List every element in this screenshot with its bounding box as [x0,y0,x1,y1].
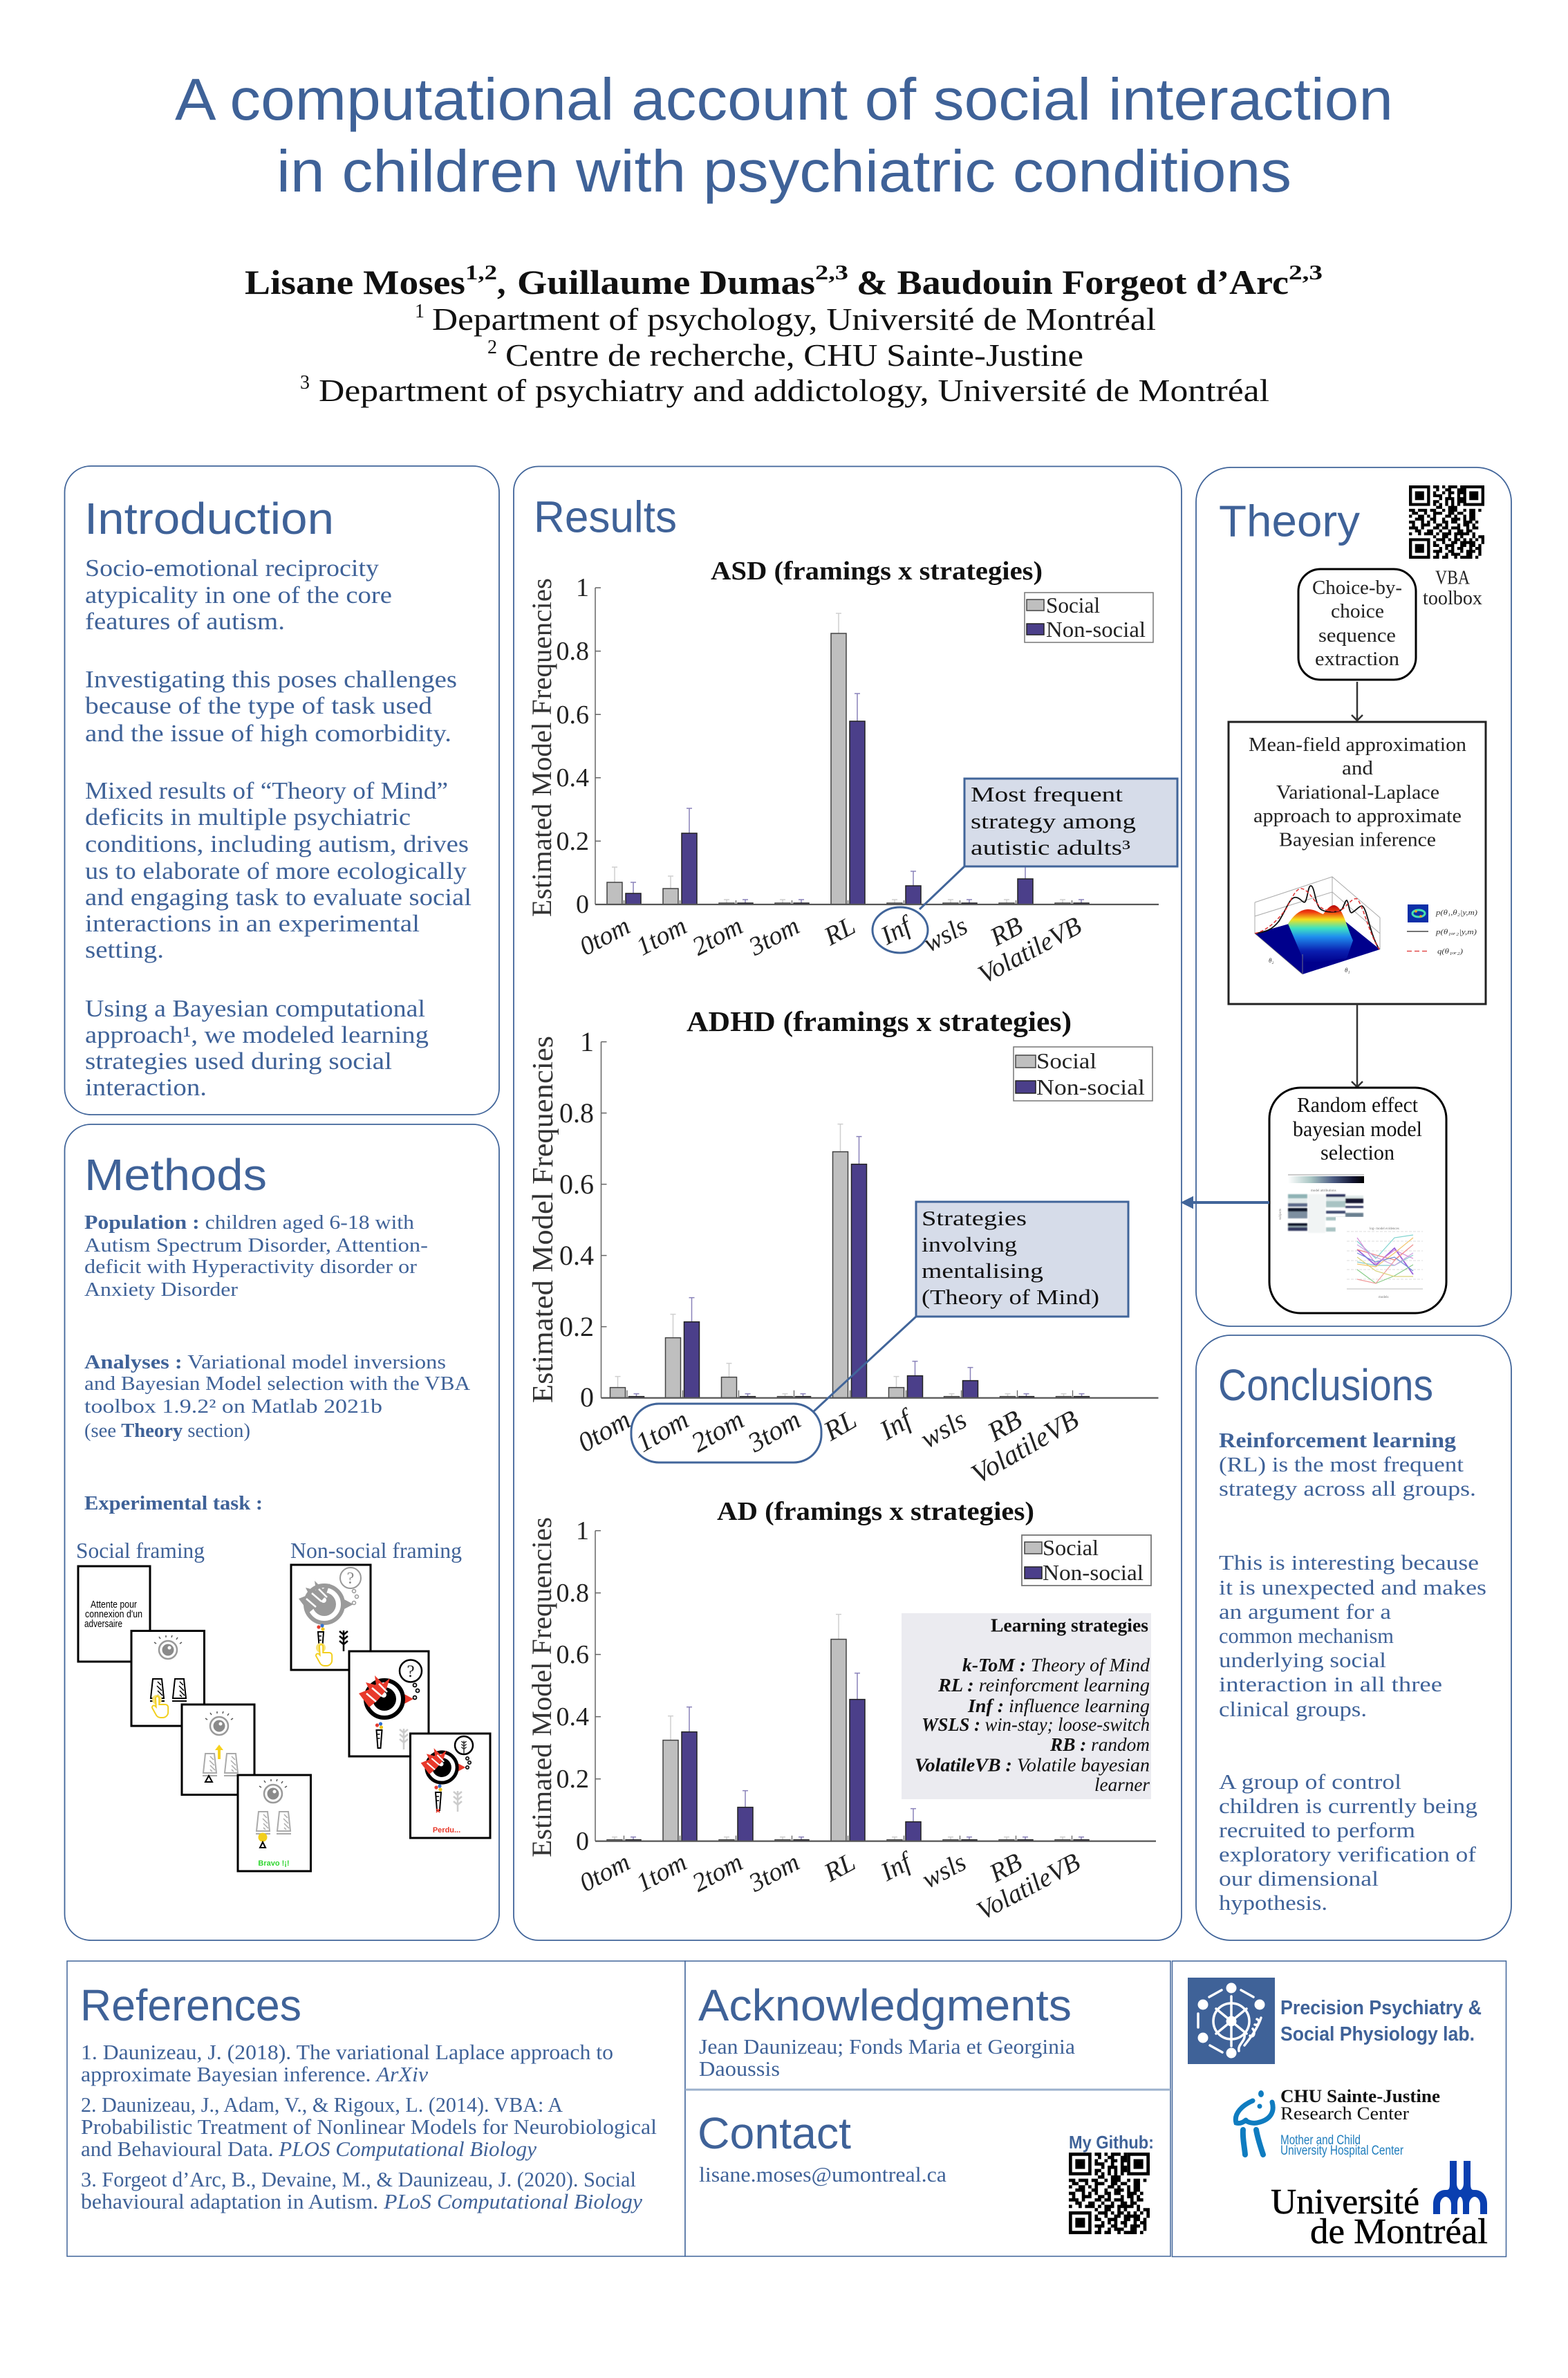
chart: log model evidence lines: models [1379,1296,1388,1299]
x tick labels: 0tom [575,911,635,962]
label: VBA toolbox: toolbox [1423,588,1482,609]
card: gray bird choosing [291,1565,371,1670]
text block: introduction body: Using a Bayesian computational [85,995,425,1022]
card: waiting screen [78,1566,150,1662]
text block: conclusion 3: hypothesis. [1219,1891,1327,1915]
chart: ASD framings x strategies [526,557,1177,990]
card: waiting screen: Attente pour [91,1599,137,1610]
bars and axes [601,1042,1159,1398]
x tick labels: 2tom [687,911,747,962]
text block: introduction body: Mixed results of “Theory of Mind” [85,777,448,804]
legend: Non-social [1036,1075,1145,1099]
legend: Non-social [1046,617,1146,642]
text: acknowledgments body: Daoussis [699,2056,780,2081]
flow step: random effect model selection [1269,1088,1446,1313]
chart: log model evidence lines [1336,1217,1423,1300]
callout: strategies involving mentalising: Strategies [922,1206,1027,1230]
x tick labels: RL [819,1848,860,1888]
card: cup lifted [182,1704,254,1795]
chart: model attribution heatmap: subjects [1279,1209,1282,1220]
arrow: to model selection box [1352,1004,1363,1087]
card: perdu outcome [411,1734,490,1838]
text: experimental task label: Experimental task : [84,1492,263,1514]
y tick labels: 0.4 [556,763,589,792]
text block: conclusion 2: This is interesting because [1219,1550,1479,1575]
box: learning strategies key: VolatileVB : Volatile bayesian [915,1755,1150,1776]
text block: reference list: and Behavioural Data. PLOS Computational Biology [81,2137,536,2161]
icon: VBA toolbox QR code [1409,485,1484,559]
x tick labels: Inf [874,1402,920,1447]
flow step: choice sequence extraction: sequence [1318,625,1396,647]
legend: Social [1036,1048,1096,1073]
text block: conclusion 3: exploratory verification of [1219,1842,1477,1866]
box: learning strategies key [902,1613,1151,1799]
flow step: choice sequence extraction: Choice-by- [1312,577,1402,599]
authors: & Baudouin Forgeot d’Arc [857,263,1289,301]
text: precision psychiatry lab name: Precision Psychiatry & [1280,1997,1482,2019]
y tick labels [556,573,589,919]
heading: acknowledgments: Acknowledgments [698,1980,1072,2030]
x tick labels: RB [984,1848,1027,1888]
heading: methods: Methods [84,1150,267,1200]
affiliations [300,301,1269,408]
box: learning strategies key: RB : random [1049,1734,1150,1755]
card: red bird thinking [349,1651,429,1756]
chart title: ASD: ASD (framings x strategies) [711,557,1043,586]
x tick labels: 2tom [686,1404,749,1458]
text block: analyses: toolbox 1.9.2² on Matlab 2021b [84,1395,382,1418]
card: red bird thinking: ? [407,1662,415,1681]
chart: ADHD framings x strategies [528,1005,1159,1489]
y tick labels: 0.6 [559,1169,594,1200]
panel: results [514,466,1182,1940]
x tick labels: 1tom [631,911,691,962]
text block: population: deficit with Hyperactivity disorder or [84,1256,417,1278]
logo: CHU Sainte-Justine [1235,2086,1440,2158]
heading: references: References [80,1980,301,2030]
flow step: mean-field approximation: Mean-field approximation [1249,734,1466,756]
text block: introduction body: Socio-emotional reciprocity [85,555,380,582]
y tick labels: 0 [580,1382,594,1413]
logo: precision psychiatry lab [1188,1978,1275,2064]
text block: conclusion 3: A group of control [1219,1769,1401,1794]
card: perdu outcome: Perdu... [433,1826,460,1834]
card: waiting screen: connexion d'un [85,1609,142,1620]
chart title: AD: AD (framings x strategies) [717,1497,1034,1526]
box: learning strategies key: WSLS : win-stay; loose-switch [922,1714,1150,1735]
x tick labels: 3tom [744,1848,804,1898]
panel: conclusions [1196,1335,1511,1940]
y tick labels: 0.4 [559,1240,594,1271]
text block: conclusion 3: recruited to perform [1219,1818,1415,1842]
text block: conclusion 2: an argument for a [1219,1599,1391,1624]
affiliations: 3 [300,372,310,393]
text block: conclusion 2 [1219,1550,1486,1721]
chart: 3D posterior surface [1255,877,1380,974]
x tick labels: 1tom [631,1848,691,1898]
text block: introduction body: deficits in multiple psychiatric [85,803,411,830]
text block: conclusion 2: common mechanism [1219,1624,1394,1648]
callout: strategies involving mentalising: mentalising [922,1258,1043,1283]
flow step: random effect model selection: bayesian model [1293,1117,1422,1141]
text block: analyses: and Bayesian Model selection with the VBA [84,1373,470,1395]
label: non-social framing: Non-social framing [290,1538,462,1563]
logo: Université de Montréal: Université [1271,2182,1419,2222]
panel: logos [1173,1961,1506,2257]
card: gray bird choosing: ? [347,1570,354,1588]
text block: analyses: (see Theory section) [84,1420,250,1442]
y tick labels: 0 [576,890,589,919]
panel: introduction [65,466,499,1115]
text block: conclusion 3: our dimensional [1219,1866,1379,1891]
callout: most frequent strategy: strategy among [971,809,1136,833]
panel: references [67,1961,685,2256]
text block: introduction body: strategies used during social [85,1048,392,1075]
flow step: mean-field approximation: Variational-Laplace [1276,782,1439,803]
label: VBA toolbox [1423,567,1482,609]
authors [245,260,1323,301]
flow step: mean-field approximation: Bayesian inference [1279,830,1436,851]
x tick labels: VolatileVB [966,1404,1084,1489]
logo: CHU Sainte-Justine: Research Center [1280,2103,1409,2124]
authors: 2,3 [815,260,848,284]
text: acknowledgments body [699,2034,1075,2081]
text block: introduction body: setting. [85,936,164,963]
box: learning strategies key: Inf : influence learning [967,1696,1150,1716]
x tick labels: 1tom [631,1404,694,1458]
chart: model attribution heatmap: model attributions [1311,1189,1336,1193]
text block: reference list: behavioural adaptation in Autism. PLoS Computational Biology [81,2189,642,2213]
text block: conclusion 3: children is currently being [1219,1794,1477,1818]
text block: introduction body [85,555,472,1101]
x tick labels: Inf [875,1846,918,1887]
x tick labels [572,1402,1084,1489]
text block: conclusion 1 [1219,1428,1476,1501]
text block: conclusion 3 [1219,1769,1477,1915]
box: learning strategies key: Learning strategies [991,1615,1148,1636]
card: waiting screen: adversaire [84,1619,122,1630]
legend [1022,1535,1151,1586]
text block: introduction body: Investigating this poses challenges [85,666,457,693]
box: learning strategies key: learner [1094,1774,1150,1795]
figure: non-social framing task cards [291,1565,490,1838]
affiliations: 1 [415,301,424,322]
x tick labels: wsls [919,911,972,958]
chart title: ADHD: ADHD (framings x strategies) [687,1005,1072,1037]
y tick labels: 0.2 [556,827,589,856]
text block: analyses: Analyses : Variational model inversions [84,1351,446,1373]
callout: most frequent strategy [872,779,1177,953]
text block: population [84,1211,428,1301]
text block: reference list: 2. Daunizeau, J., Adam, V., & Rigoux, L. (2014). VBA: A [81,2092,563,2117]
text block: introduction body: us to elaborate of more ecologically [85,857,467,884]
authors: 2,3 [1289,260,1323,284]
legend [1025,593,1153,642]
x tick labels: VolatileVB [973,911,1086,990]
figure: social framing task cards [78,1566,311,1871]
text block: population: Population : children aged 6-18 with [84,1211,415,1234]
card: choosing a cup [131,1631,205,1726]
x tick labels: 3tom [744,911,804,962]
label: VBA toolbox: VBA [1435,567,1471,589]
x tick labels [575,1846,1085,1926]
text block: population: Anxiety Disorder [84,1279,238,1301]
text: precision psychiatry lab name [1280,1997,1482,2045]
flow step: choice sequence extraction: extraction [1315,649,1399,670]
y tick labels: 0.8 [556,637,589,666]
heading: theory: Theory [1219,496,1360,546]
text: acknowledgments body: Jean Daunizeau; Fonds Maria et Georginia [699,2034,1075,2059]
x tick labels [575,910,1086,990]
y tick labels: 0.8 [556,1579,589,1608]
legend: Non-social [1043,1560,1144,1585]
x tick labels: wsls [917,1848,971,1895]
heading: conclusions: Conclusions [1218,1360,1433,1410]
y tick labels: 0 [576,1827,589,1856]
panel: theory [1196,467,1511,1326]
icon: github QR code [1069,2153,1150,2234]
y tick labels: 0.8 [559,1097,594,1128]
legend: Social [1043,1535,1099,1560]
y tick labels: 0.6 [556,700,589,730]
chart: model attribution heatmap [1279,1175,1364,1233]
text block: introduction body: interaction. [85,1074,207,1101]
x tick labels: 3tom [742,1404,806,1458]
y tick labels: 1 [576,1516,589,1545]
text block: reference list: 3. Forgeot d’Arc, B., Devaine, M., & Daunizeau, J. (2020). Social [81,2167,636,2191]
chart: 3D posterior surface: θ₁ [1345,967,1350,974]
card: bravo outcome [238,1775,311,1871]
bars and axes [595,1531,1156,1841]
x tick labels: RB [985,911,1027,952]
legend: 3D posterior [1407,904,1477,956]
affiliations: Department of psychiatry and addictology, Université de Montréal [319,373,1269,408]
title [175,67,1393,205]
title: in children with psychiatric conditions [277,139,1291,205]
text block: introduction body: approach¹, we modeled learning [85,1021,429,1048]
y tick labels: 1 [580,1026,594,1057]
legend [1014,1047,1152,1101]
affiliations: 2 [487,337,497,358]
text block: reference list: Probabilistic Treatment of Nonlinear Models for Neurobiological [81,2115,657,2139]
text block: introduction body: and engaging task to evaluate social [85,884,472,911]
flow step: mean-field approximation: approach to approximate [1253,806,1462,827]
text block: introduction body: features of autism. [85,608,285,635]
text block: conclusion 2: clinical groups. [1219,1697,1367,1721]
logo: Université de Montréal: de Montréal [1310,2212,1488,2251]
logo: Université de Montréal [1271,2161,1488,2251]
x tick labels: 0tom [575,1848,635,1898]
box: learning strategies key: k-ToM : Theory of Mind [962,1655,1150,1675]
affiliations: Centre de recherche, CHU Sainte-Justine [505,337,1083,373]
legend: Social [1046,593,1100,617]
y tick labels: 1 [576,573,589,602]
callout: most frequent strategy: autistic adults³ [971,835,1130,860]
y tick labels: 0.2 [556,1765,589,1794]
arrow: model selection to results [1184,1198,1269,1207]
text block: introduction body: conditions, including autism, drives [85,830,469,857]
text block: reference list [81,2040,657,2213]
y tick labels [559,1026,594,1413]
x tick labels: 0tom [572,1404,636,1458]
text block: introduction body: atypicality in one of the core [85,582,392,609]
text block: introduction body: because of the type of task used [85,692,433,719]
legend: 3D posterior: q(θ₁ₒᵣ₂) [1437,947,1463,956]
logo: CHU Sainte-Justine: University Hospital Center [1280,2144,1404,2158]
y axis label: Estimated Model Frequencies [526,578,557,917]
label: social framing: Social framing [76,1538,205,1563]
text block: introduction body: and the issue of high comorbidity. [85,720,451,747]
y tick labels: 0.2 [559,1311,594,1342]
bars and axes [595,588,1159,904]
chart: AD framings x strategies [526,1497,1156,1926]
text block: conclusion 2: underlying social [1219,1648,1386,1672]
y tick labels: 0.4 [556,1702,589,1731]
legend: 3D posterior: p(θ₁ₒᵣ₂|y,m) [1435,928,1477,936]
title: A computational account of social interaction [175,67,1393,133]
y tick labels [556,1516,589,1856]
chart: 3D posterior surface: θ₂ [1269,957,1274,964]
heading: introduction: Introduction [84,494,334,544]
y axis label: Estimated Model Frequencies [528,1036,559,1403]
legend: 3D posterior: p(θ₁,θ₂|y,m) [1435,909,1477,917]
panel: acknowledgments and contact [685,1961,1170,2256]
text block: analyses [84,1351,470,1442]
heading: contact: Contact [698,2108,851,2158]
flow step: mean-field approximation [1229,722,1486,1004]
x tick labels: RL [818,1404,861,1447]
card: bravo outcome: Bravo !¡! [258,1859,290,1868]
authors: Guillaume Dumas [517,263,815,301]
callout: most frequent strategy: Most frequent [971,782,1123,806]
text block: conclusion 2: it is unexpected and makes [1219,1575,1486,1599]
chart: log model evidence lines: log- model evidences [1370,1227,1399,1231]
y axis label: Estimated Model Frequencies [526,1517,557,1857]
authors: Lisane Moses [245,263,465,301]
text block: population: Autism Spectrum Disorder, Attention- [84,1234,428,1256]
flow step: random effect model selection: selection [1320,1140,1394,1164]
flow step: random effect model selection: Random effect [1297,1093,1418,1117]
authors: 1,2 [465,260,497,284]
logo: CHU Sainte-Justine: CHU Sainte-Justine [1280,2086,1440,2106]
label: my github: My Github: [1069,2132,1154,2153]
arrow: to mean-field box [1352,682,1363,721]
text block: conclusion 1: Reinforcement learning [1219,1428,1457,1452]
panel: methods [65,1124,499,1940]
x tick labels: 2tom [687,1848,747,1898]
x tick labels: VolatileVB [972,1848,1085,1926]
x tick labels: RL [819,911,860,951]
callout: strategies involving mentalising: involving [922,1232,1017,1256]
flow step: choice sequence extraction [1298,569,1416,680]
text: contact email: lisane.moses@umontreal.ca [699,2162,946,2186]
x tick labels: Inf [875,910,918,951]
callout: strategies involving mentalising [631,1202,1128,1462]
heading: results: Results [534,492,677,542]
box: learning strategies key: RL : reinforcment learning [937,1675,1150,1696]
affiliations: Department of psychology, Université de Montréal [432,301,1156,337]
text block: conclusion 2: interaction in all three [1219,1672,1442,1696]
logo: CHU Sainte-Justine: Mother and Child [1280,2133,1361,2148]
text block: reference list: 1. Daunizeau, J. (2018). The variational Laplace approach to [81,2040,613,2064]
flow step: choice sequence extraction: choice [1331,601,1384,622]
flow step: mean-field approximation: and [1342,758,1373,779]
authors: , [497,263,506,301]
text block: conclusion 1: strategy across all groups. [1219,1476,1476,1501]
text block: reference list: approximate Bayesian inference. ArXiv [81,2062,428,2086]
x tick labels: wsls [915,1404,972,1454]
text block: introduction body: interactions in an experimental [85,910,420,937]
text: precision psychiatry lab name: Social Physiology lab. [1280,2023,1475,2045]
y tick labels: 0.6 [556,1640,589,1669]
x tick labels: RB [982,1404,1027,1448]
text block: conclusion 1: (RL) is the most frequent [1219,1452,1464,1476]
callout: strategies involving mentalising: (Theory of Mind) [922,1285,1099,1309]
